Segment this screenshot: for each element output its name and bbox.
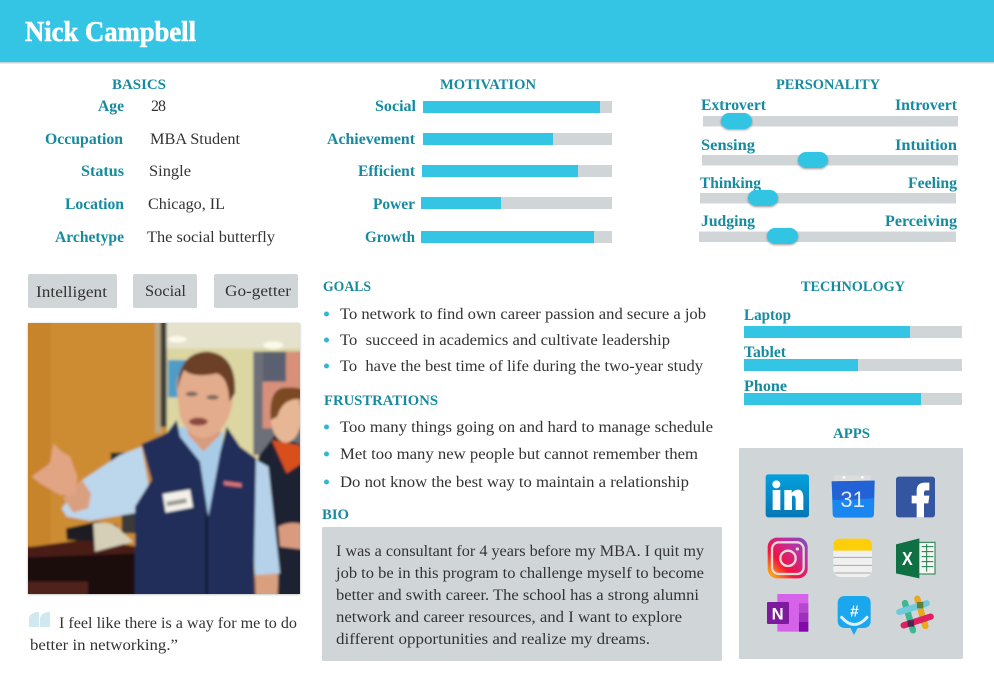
tag: social: Social — [145, 283, 187, 300]
panel: frustrations — [324, 393, 713, 491]
bar: laptop: Laptop — [744, 307, 791, 324]
bar: social: Social — [375, 98, 417, 115]
icon: slack — [899, 599, 931, 630]
bar: power — [373, 196, 612, 213]
slider: sensing to intuition: Intuition — [895, 137, 957, 154]
tag: go-getter: Go-getter — [225, 283, 292, 300]
field: status: Status — [81, 163, 124, 180]
slider: thinking to feeling: Thinking — [700, 175, 761, 192]
heading: motivation: MOTIVATION — [440, 77, 536, 93]
bio card: network and career resources, and I want to explore — [336, 609, 682, 626]
quote text: I feel like there is a way for me to do — [59, 615, 297, 632]
icon: notes — [833, 539, 872, 577]
goal list — [324, 306, 706, 375]
slider: extrovert to introvert: Introvert — [895, 97, 958, 114]
field: location — [65, 196, 225, 213]
quote text — [30, 615, 297, 654]
heading: basics: BASICS — [112, 77, 166, 93]
heading: apps: APPS — [833, 426, 870, 442]
field: age — [98, 98, 166, 115]
tag: intelligent — [28, 274, 117, 308]
frustration list: Too many things going on and hard to manage schedule — [340, 419, 713, 436]
icon: google calendar: 31 — [840, 487, 865, 512]
icon: quotation marks — [29, 612, 50, 627]
slider: sensing to intuition: Sensing — [701, 137, 755, 154]
quote text: better in networking.” — [30, 637, 178, 654]
field: archetype: The social butterfly — [147, 229, 275, 246]
bar: growth — [365, 229, 612, 246]
field: occupation: MBA Student — [150, 131, 241, 148]
field: archetype: Archetype — [55, 229, 124, 246]
bar: social — [375, 98, 612, 115]
photo: man in navy vest gesturing — [20, 320, 307, 607]
header banner — [0, 0, 994, 64]
bar: laptop — [744, 307, 962, 338]
frustration list: Do not know the best way to maintain a relationship — [340, 474, 689, 491]
bar: efficient — [358, 163, 612, 180]
apps card — [739, 448, 963, 659]
slider: thinking to feeling: Feeling — [908, 175, 957, 192]
bio card — [322, 527, 722, 661]
panel: personality — [699, 77, 958, 244]
panel: goals — [323, 279, 706, 375]
field: age: 28 — [151, 98, 166, 115]
bar: power: Power — [373, 196, 415, 213]
heading: bio: BIO — [322, 507, 349, 523]
heading: personality: PERSONALITY — [776, 77, 880, 93]
frustration list — [324, 419, 713, 491]
icon: google calendar — [832, 475, 875, 518]
slider: extrovert to introvert: Extrovert — [701, 97, 767, 114]
field: occupation: Occupation — [45, 131, 123, 148]
bio card: better and swith career. The school has a strong alumni — [336, 587, 700, 604]
trait tags — [28, 274, 298, 308]
field: age: Age — [98, 98, 124, 115]
slider: judging to perceiving — [699, 213, 957, 244]
icon: linkedin — [766, 474, 809, 517]
heading: technology: TECHNOLOGY — [801, 279, 905, 295]
slider: extrovert to introvert — [701, 97, 958, 129]
goal list: To succeed in academics and cultivate leadership — [340, 332, 670, 349]
slider: sensing to intuition — [701, 137, 958, 168]
bio card: I was a consultant for 4 years before my MBA. I quit my — [336, 543, 704, 560]
panel: technology — [744, 279, 962, 405]
icon: excel: X — [902, 548, 913, 569]
icon: facebook — [896, 477, 935, 517]
icon: groupme — [838, 596, 871, 635]
bar: achievement: Achievement — [327, 131, 416, 148]
field: location: Chicago, IL — [148, 196, 225, 213]
slider: judging to perceiving: Perceiving — [885, 213, 957, 230]
panel: bio — [322, 507, 722, 661]
bar: achievement — [327, 131, 612, 148]
bar: efficient: Efficient — [358, 163, 416, 180]
panel: basics — [45, 77, 275, 246]
field: status — [81, 163, 191, 180]
icon: onenote — [767, 594, 808, 632]
quote — [29, 612, 297, 654]
field: occupation — [45, 131, 241, 148]
bar: phone: Phone — [744, 378, 787, 395]
field: archetype — [55, 229, 275, 246]
panel: motivation — [327, 77, 612, 246]
bio card: job to be in this program to challenge myself to become — [335, 565, 704, 582]
slider: judging to perceiving: Judging — [701, 213, 755, 230]
app icons — [766, 474, 935, 635]
bar: growth: Growth — [365, 229, 415, 246]
bar: tablet: Tablet — [744, 344, 787, 361]
field: location: Location — [65, 196, 124, 213]
icon: groupme: # — [850, 603, 859, 620]
bio card: different opportunities and realize my dreams. — [336, 631, 650, 648]
tag: social — [133, 274, 197, 308]
heading: goals: GOALS — [323, 279, 371, 295]
bar: phone — [744, 378, 962, 405]
goal list: To network to find own career passion and secure a job — [340, 306, 706, 323]
name title: Nick Campbell — [25, 17, 196, 48]
tag: intelligent: Intelligent — [36, 284, 108, 301]
goal list: To have the best time of life during the two-year study — [340, 358, 703, 375]
frustration list: Met too many new people but cannot remember them — [340, 446, 699, 463]
icon: excel — [896, 538, 935, 578]
bar: tablet — [744, 344, 962, 371]
tag: go-getter — [214, 274, 298, 308]
field: status: Single — [149, 163, 191, 180]
panel: apps — [739, 426, 963, 659]
slider: thinking to feeling — [700, 175, 957, 206]
heading: frustrations: FRUSTRATIONS — [324, 393, 438, 409]
icon: onenote: N — [772, 604, 784, 623]
icon: instagram — [768, 538, 808, 578]
